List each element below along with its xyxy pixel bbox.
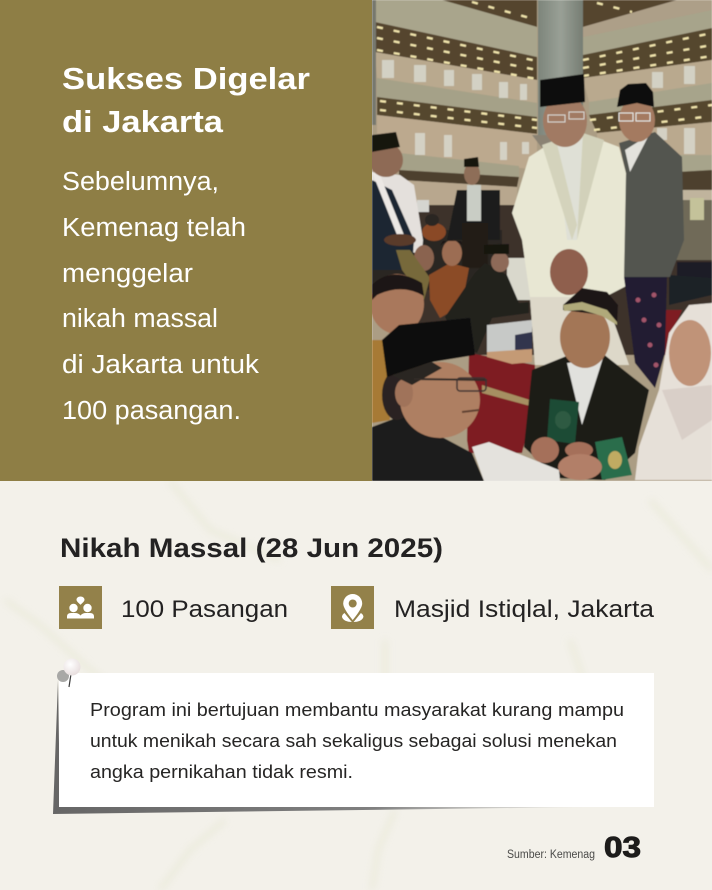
red carpet [467, 310, 682, 453]
text block: intro description: 100 pasangan. [62, 397, 241, 425]
card text: angka pernikahan tidak resmi. [90, 762, 353, 782]
text block: intro description: menggelar [62, 260, 194, 288]
photo: couples and officials in the mosque [369, 0, 712, 481]
icon: couples [59, 586, 102, 629]
text block: intro description [62, 168, 259, 425]
panel: olive title panel [0, 0, 372, 481]
marble background [0, 481, 712, 890]
card text: Program ini bertujuan membantu masyarakat kurang mampu [90, 700, 624, 720]
label: 100 Pasangan: 100 Pasangan [121, 596, 288, 623]
card shadow [53, 680, 590, 814]
label: Masjid Istiqlal, Jakarta: Masjid Istiqlal, Jakarta [394, 596, 655, 623]
icon: location pin [331, 586, 374, 629]
seated official in dark suit [445, 244, 529, 353]
text block: intro description: nikah massal [62, 305, 218, 333]
callout: program note card [53, 658, 654, 814]
text block: intro description: di Jakarta untuk [62, 351, 259, 379]
table [472, 442, 560, 481]
gift box [487, 320, 532, 364]
page number: 03 [604, 832, 641, 864]
heading: Nikah Massal (28 Jun 2025): Nikah Massal (28 Jun 2025) [60, 533, 443, 563]
icon: push pin [57, 658, 80, 687]
heading: Sukses Digelar di Jakarta: di Jakarta [62, 104, 224, 139]
batik guests [396, 240, 469, 318]
ceiling lights [377, 2, 712, 130]
card text: untuk menikah secara sah sekaligus sebagai solusi menekan [90, 731, 617, 751]
groom [524, 288, 649, 480]
heading: Sukses Digelar di Jakarta: Sukses Digelar [62, 61, 310, 96]
text block: intro description: Sebelumnya, [62, 168, 219, 196]
man in the background [447, 157, 500, 268]
heading: Sukses Digelar di Jakarta [62, 61, 310, 139]
text block: intro description: Kemenag telah [62, 214, 246, 242]
ceiling and balconies [372, 0, 712, 215]
card text [90, 700, 624, 782]
windows [382, 60, 696, 160]
card body [59, 673, 654, 807]
column [538, 0, 583, 135]
crowd [372, 198, 712, 355]
bride [635, 303, 712, 480]
front official with peci [372, 318, 487, 481]
man in white suit [512, 74, 632, 365]
source note: Sumber: Kemenag [507, 849, 595, 861]
marriage books held up [531, 399, 632, 480]
smiling man at left [370, 274, 424, 423]
man in gray suit [617, 83, 684, 388]
left man in vest [369, 132, 423, 270]
